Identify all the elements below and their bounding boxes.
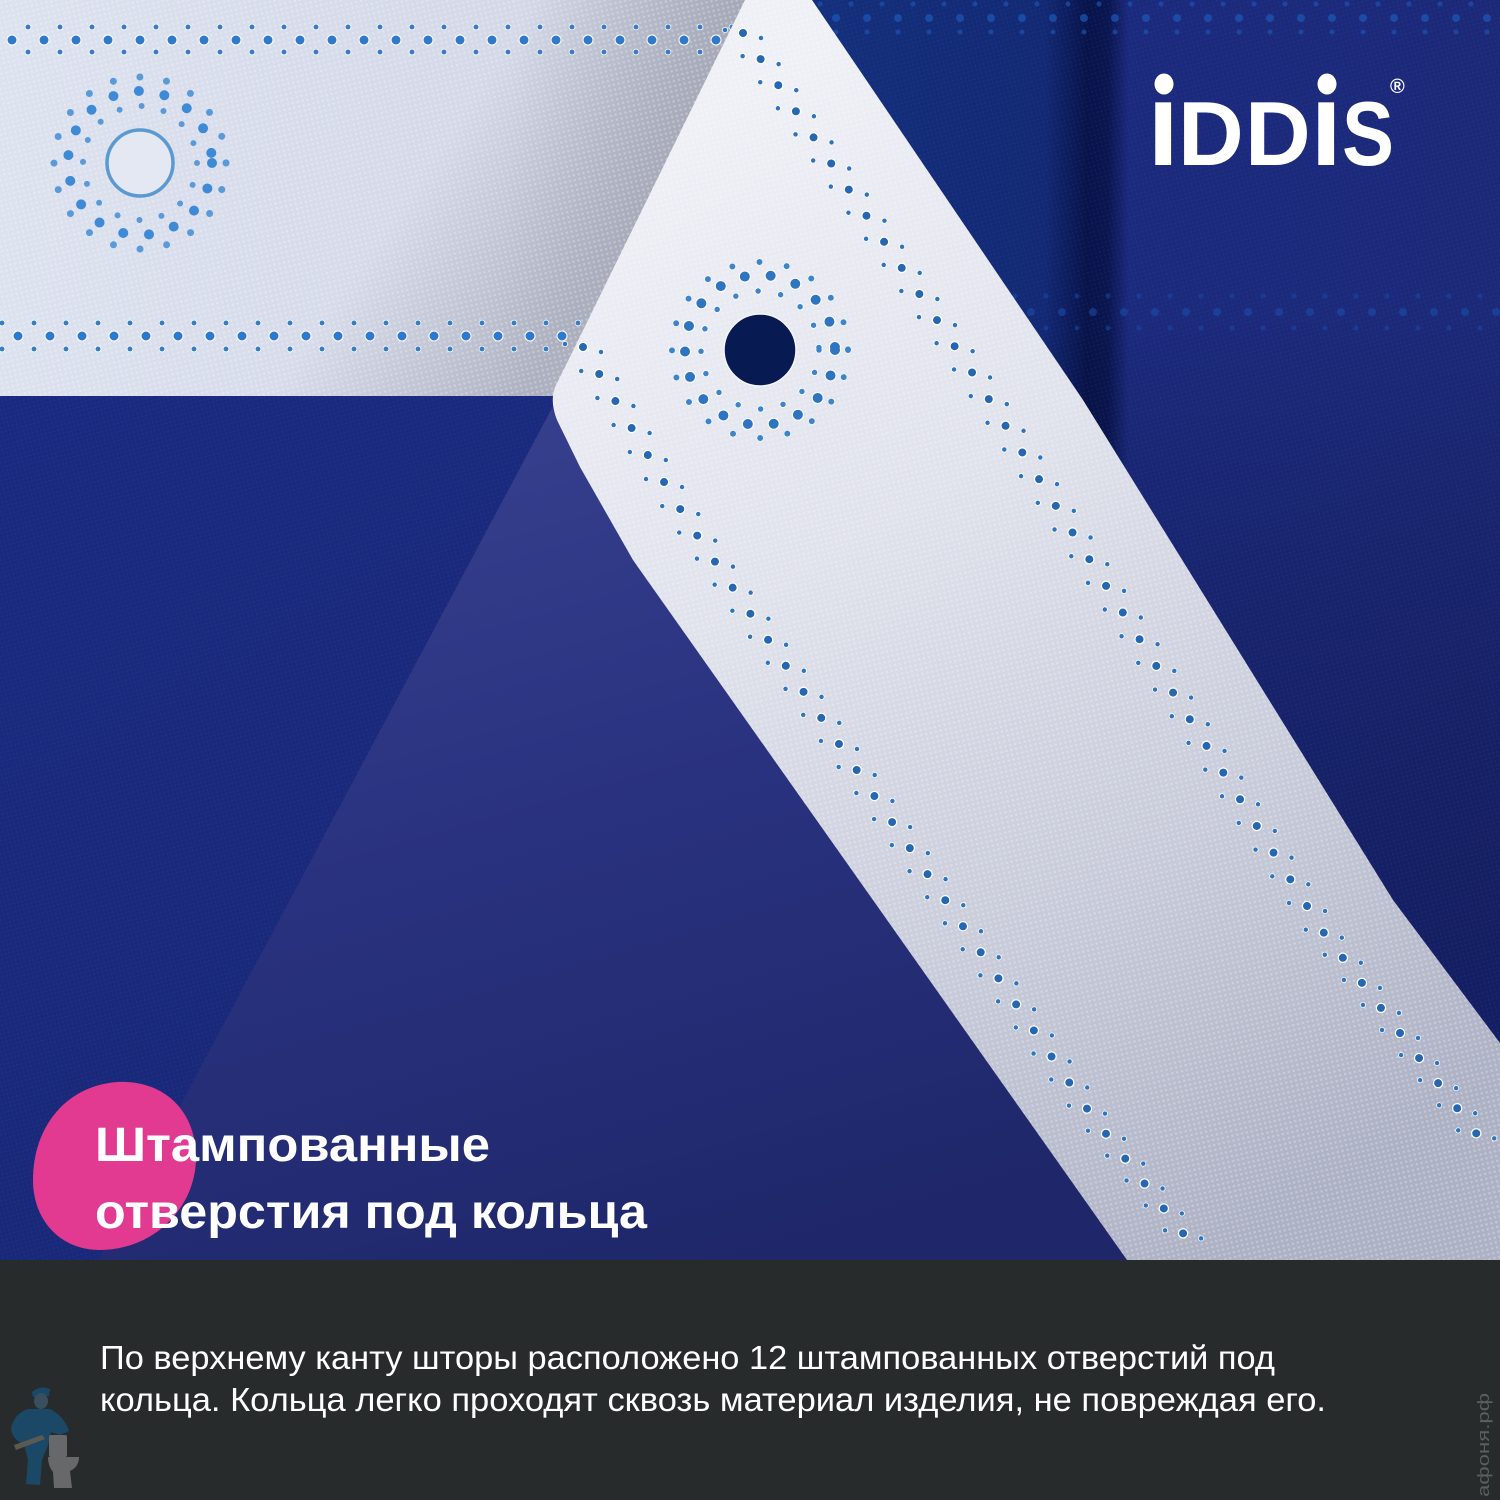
strip fabric [553,0,1500,1260]
punched hole with dot rings [672,262,848,438]
white hem: folded diagonal strip [553,0,1500,1260]
band fabric [0,0,760,396]
accent: pink blob [33,1082,196,1250]
white hem: horizontal band [0,0,760,396]
footer background [0,1260,1500,1500]
dotted seam: strip right [725,30,1500,1163]
registered mark: ® [1390,76,1405,98]
curtain fold: lighter triangle [98,408,1135,1260]
panel: description footer [0,1260,1500,1500]
icon: plumber with toilet watermark [11,1388,79,1488]
heading [95,1119,647,1239]
logo letter I: I [1311,84,1341,185]
plumber figure [11,1388,69,1485]
toilet [48,1435,79,1488]
logo letter D: D [1178,84,1244,185]
logo letter I: I [1148,84,1178,185]
logo letter S: S [1342,84,1394,185]
dotted seam: curtain middle right [1015,296,1500,328]
curtain panel: lower left [0,390,700,1260]
heading line 1: Штампованные [95,1119,490,1172]
description text: По верхнему канту шторы расположено 12 штампованных отверстий под [100,1339,1275,1376]
logo: IDDIS [1148,74,1405,185]
watermark: site name: афоня.рф [1474,1393,1493,1497]
logo letter D: D [1245,84,1311,185]
dotted seam: curtain top right [820,4,1500,32]
dotted seam: lower band [2,323,590,349]
logo i-dots [1154,74,1336,94]
heading line 2: отверстия под кольца [95,1186,647,1239]
punched hole: covered by fabric, with dot rings [54,77,226,249]
dotted seam: upper band [12,27,740,52]
curtain panel: right side with vertical fold [740,0,1500,1260]
description text: кольца. Кольца легко проходят сквозь материал изделия, не повреждая его. [100,1381,1326,1418]
description text [100,1339,1326,1418]
dotted seam: strip left [565,344,1207,1246]
